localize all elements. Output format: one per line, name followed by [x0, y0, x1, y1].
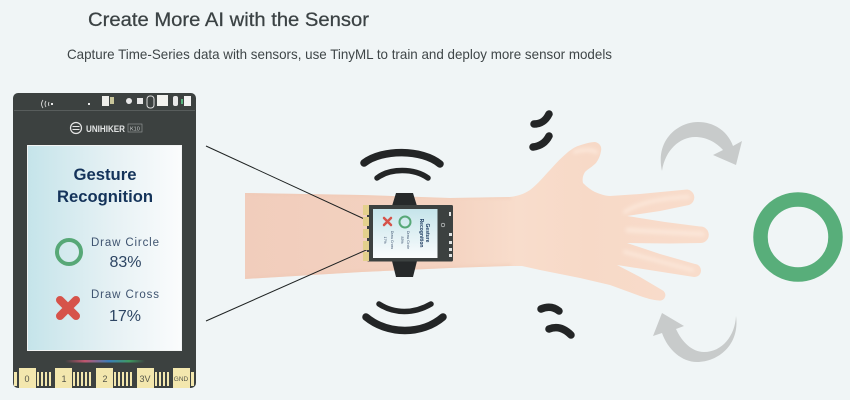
watch heading	[418, 219, 430, 247]
rotation arrow bottom	[653, 313, 736, 362]
screen heading	[57, 166, 153, 206]
watch pins	[363, 205, 369, 261]
watch labels: 83%	[400, 236, 404, 244]
screen heading: Gesture	[74, 166, 136, 184]
green circle gesture	[760, 200, 836, 274]
gold edge connector: 3V	[139, 374, 151, 384]
cross result: 17%	[109, 308, 141, 325]
watch labels: Draw Circle	[406, 231, 410, 249]
watch labels: 17%	[383, 236, 387, 244]
watch side logo	[441, 223, 445, 227]
gold edge connector: 0	[24, 374, 30, 384]
brand logo: K10	[130, 126, 140, 132]
motion marks bottom	[541, 307, 571, 335]
motion marks top	[533, 114, 549, 147]
vibration arcs above wrist	[364, 153, 440, 178]
circle result: 83%	[109, 254, 142, 271]
watch body	[367, 205, 453, 262]
brand logo: UNIHIKER	[86, 124, 125, 135]
rotation arrow top	[661, 122, 742, 171]
watch circle icon	[400, 216, 410, 228]
callout lines	[206, 146, 373, 321]
screen heading: Recognition	[57, 188, 153, 206]
circle result: Draw Circle	[91, 237, 159, 249]
sensor status bar	[14, 95, 195, 110]
watch side sensors	[449, 212, 452, 257]
cross result	[60, 289, 159, 325]
brand logo	[70, 122, 142, 135]
watch labels: Draw Cross	[390, 231, 394, 249]
cross result: Draw Cross	[91, 289, 159, 301]
watch cross icon	[384, 218, 391, 225]
circle result	[57, 237, 159, 271]
rgb light bar	[65, 360, 145, 362]
watch strap	[392, 193, 417, 277]
gold edge connector: 1	[61, 374, 67, 384]
vibration arcs below wrist	[366, 304, 443, 330]
gold edge connector: 2	[102, 374, 108, 384]
watch heading: Recognition	[418, 219, 424, 247]
watch screen	[373, 209, 438, 258]
wrist device	[363, 193, 453, 277]
screen	[28, 146, 182, 350]
title: Create More AI with the Sensor	[88, 10, 370, 31]
watch labels	[383, 231, 410, 249]
watch heading: Gesture	[424, 224, 430, 243]
gold edge connector	[14, 368, 194, 388]
large device: UNIHIKER K10	[13, 93, 196, 388]
subtitle: Capture Time-Series data with sensors, use TinyML to train and deploy more sensor models	[67, 46, 612, 62]
gold edge connector: GND	[174, 376, 189, 383]
arm and hand	[245, 142, 709, 301]
